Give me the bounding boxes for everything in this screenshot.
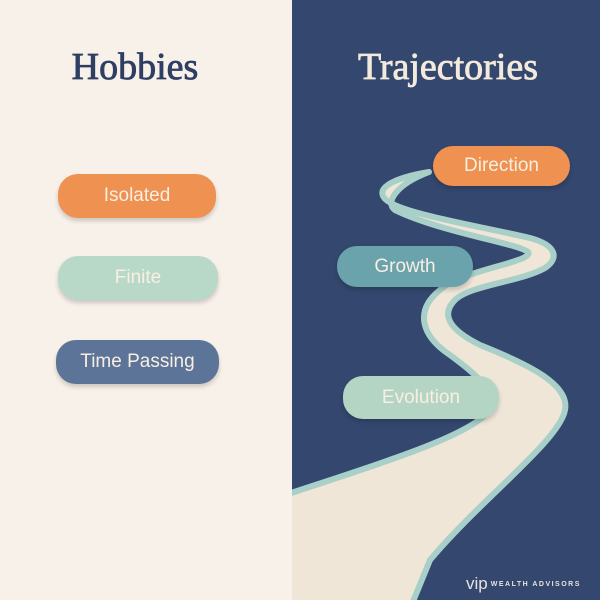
logo bbox=[466, 574, 581, 593]
pill: Isolated bbox=[58, 174, 216, 218]
pill: Isolated: Isolated bbox=[104, 185, 170, 206]
pill: Time Passing: Time Passing bbox=[80, 351, 195, 372]
pill: Growth: Growth bbox=[374, 256, 436, 276]
pill: Evolution bbox=[343, 376, 499, 419]
pill: Finite: Finite bbox=[115, 267, 161, 288]
title: Hobbies: Hobbies bbox=[72, 46, 198, 88]
title: Trajectories: Trajectories bbox=[358, 46, 538, 88]
panel: trajectories bbox=[292, 0, 600, 600]
panel: hobbies bbox=[0, 0, 292, 600]
pill: Direction: Direction bbox=[464, 155, 539, 176]
pill: Evolution: Evolution bbox=[382, 386, 460, 408]
logo: vip bbox=[466, 574, 488, 593]
road illustration bbox=[292, 169, 568, 600]
pill: Growth bbox=[337, 246, 473, 287]
logo: WEALTH ADVISORS bbox=[491, 580, 581, 588]
pill: Time Passing bbox=[56, 340, 219, 384]
pill: Direction bbox=[433, 146, 570, 186]
pill: Finite bbox=[58, 256, 218, 300]
